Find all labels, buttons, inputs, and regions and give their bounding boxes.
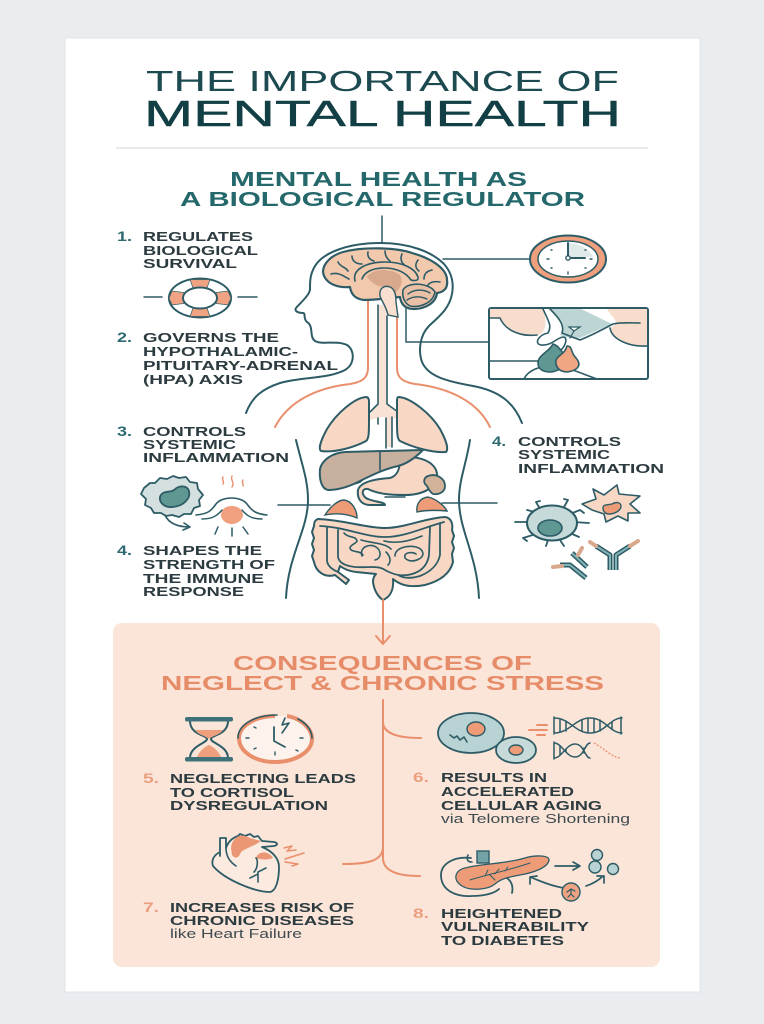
text: item 4 left: SHAPES THE (143, 543, 262, 558)
text: item 3: CONTROLS (143, 424, 246, 439)
text: item 4 right: INFLAMMATION (518, 461, 664, 476)
icon: clock (530, 236, 606, 282)
panel: white card (65, 38, 700, 992)
icon: heart (212, 834, 304, 892)
connector lines (278, 216, 530, 505)
text: item 5: NEGLECTING LEADS (170, 771, 356, 786)
lungs (320, 397, 447, 452)
text: item 4 left: THE IMMUNE (143, 571, 264, 586)
heading: biological regulator: MENTAL HEALTH AS (230, 169, 527, 191)
text: item 8: TO DIABETES (441, 933, 564, 948)
text: item 4 left (117, 543, 275, 599)
text: item 4 left: STRENGTH OF (143, 557, 275, 572)
text: item 2 (117, 330, 338, 387)
panel: consequences (113, 623, 660, 967)
heading: consequences (161, 653, 604, 695)
branching connector (343, 700, 421, 876)
arrow head (376, 622, 390, 644)
text: item 1: 1. (117, 229, 132, 244)
text: item 3: SYSTEMIC (143, 437, 237, 452)
icon: lifebuoy (144, 278, 257, 318)
icon: pancreas (441, 850, 618, 901)
text: item 5 (143, 771, 356, 813)
text: item 7 (143, 900, 354, 941)
text: item 8: VULNERABILITY (441, 919, 589, 934)
text: item 6: CELLULAR AGING (441, 798, 602, 813)
spinal column and trachea (370, 305, 398, 448)
title (144, 66, 621, 134)
adrenal glands (325, 497, 447, 518)
text: item 8: HEIGHTENED (441, 906, 562, 921)
text: item 5: TO CORTISOL (170, 785, 294, 800)
title: MENTAL HEALTH (144, 93, 621, 134)
text: item 2: GOVERNS THE (143, 330, 279, 345)
text: item 8: 8. (413, 906, 429, 921)
text: item 4 left: 4. (117, 543, 132, 558)
icon: immune cells (515, 485, 640, 578)
heading: consequences: CONSEQUENCES OF (233, 653, 532, 675)
text: item 4 right (492, 434, 664, 476)
liver (320, 450, 423, 490)
text: item 4 right: SYSTEMIC (518, 447, 611, 462)
text: item 2: (HPA) AXIS (143, 372, 243, 387)
text: item 4 right: 4. (492, 434, 506, 449)
text: item 2: 2. (117, 330, 132, 345)
text: item 6: via Telomere Shortening (441, 812, 630, 826)
icon: pituitary inset (489, 308, 648, 379)
brain (323, 248, 447, 317)
text: item 8 (413, 906, 589, 948)
nerves (275, 300, 490, 427)
icon: broken clock (238, 715, 312, 762)
icon: hourglass (185, 717, 233, 762)
text: item 7: 7. (143, 900, 159, 915)
text: item 3 (117, 424, 289, 465)
text: item 7: CHRONIC DISEASES (170, 913, 354, 928)
text: item 1 (117, 229, 258, 271)
spleen (424, 475, 445, 494)
text: item 6: RESULTS IN (441, 770, 547, 785)
text: item 6 (413, 770, 630, 826)
text: item 1: SURVIVAL (143, 256, 237, 271)
text: item 7: INCREASES RISK OF (170, 900, 354, 915)
stomach and duodenum (358, 457, 437, 505)
text: item 3: INFLAMMATION (143, 450, 289, 465)
text: item 7: like Heart Failure (170, 927, 302, 941)
text: item 6: 6. (413, 770, 429, 785)
heading: biological regulator: A BIOLOGICAL REGULATOR (180, 189, 586, 211)
text: item 4 right: CONTROLS (518, 434, 621, 449)
text: item 1: REGULATES (143, 229, 253, 244)
title: THE IMPORTANCE OF (146, 66, 619, 98)
heading: biological regulator (180, 169, 586, 211)
intestines (312, 517, 454, 600)
heading: consequences: NEGLECT & CHRONIC STRESS (161, 673, 604, 695)
text: item 6: ACCELERATED (441, 784, 574, 799)
text: item 5: 5. (143, 771, 159, 786)
icon: macrophage and inflammation (141, 476, 267, 536)
text: item 2: PITUITARY-ADRENAL (143, 358, 338, 373)
icon: aging cells and DNA (438, 713, 622, 763)
text: item 3: 3. (117, 424, 132, 439)
text: item 1: BIOLOGICAL (143, 243, 258, 258)
text: item 4 left: RESPONSE (143, 584, 244, 599)
arrow: body to consequences (382, 600, 384, 624)
text: item 2: HYPOTHALAMIC- (143, 344, 298, 359)
text: item 5: DYSREGULATION (170, 798, 328, 813)
body outline (246, 243, 522, 598)
